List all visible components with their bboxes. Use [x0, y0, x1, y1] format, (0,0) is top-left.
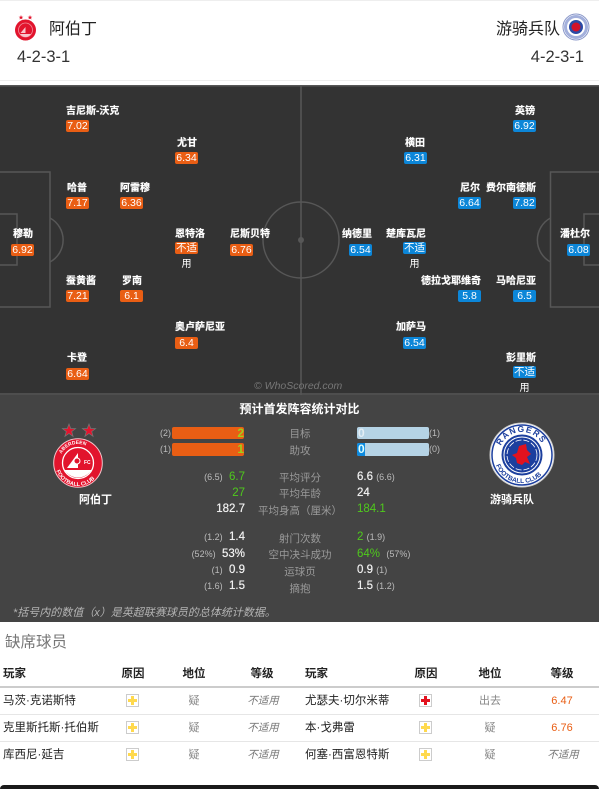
away team name: 游骑兵队	[496, 21, 560, 38]
player: 罗南: 6.1	[124, 290, 139, 302]
player: 阿雷穆	[120, 182, 150, 209]
stat: goals bar home: (2)	[160, 428, 171, 438]
age home: 27	[232, 487, 245, 499]
player: 吉尼斯-沃克: 吉尼斯-沃克	[66, 106, 119, 117]
stat: goals bar home: 2	[237, 426, 244, 440]
player: 横田: 6.31	[405, 152, 426, 164]
player: 彭里斯	[506, 352, 536, 394]
rating label: 平均评分	[279, 472, 321, 484]
player: 尼斯贝特	[230, 228, 270, 256]
away crest label: 游骑兵队	[490, 494, 534, 506]
age label: 平均年龄	[279, 488, 321, 500]
player: 楚库瓦尼: 楚库瓦尼	[386, 229, 426, 240]
player: 罗南	[120, 274, 143, 302]
row: 马茨·克诺斯特: 不适用	[247, 695, 279, 707]
player: 英镑: 英镑	[515, 106, 535, 117]
panel: match header	[0, 0, 599, 81]
column header: reason right: 原因	[414, 668, 438, 680]
icon: Aberdeen crest small	[15, 15, 36, 40]
player: 马哈尼亚: 马哈尼亚	[496, 276, 536, 287]
row: 何塞·西富恩特斯	[300, 748, 599, 762]
player: 罗南: 罗南	[122, 276, 142, 287]
column header: status right: 地位	[478, 668, 502, 680]
player: 潘杜尔: 潘杜尔	[560, 229, 590, 240]
row: 尤瑟夫·切尔米蒂: 6.47	[551, 695, 573, 707]
aerials label: 空中决斗成功	[268, 549, 332, 561]
comparison title: 预计首发阵容统计对比	[239, 402, 360, 416]
player: 德拉戈耶维奇: 德拉戈耶维奇	[421, 276, 481, 287]
player: 费尔南德斯	[486, 182, 536, 209]
home crest label: 阿伯丁	[79, 494, 112, 506]
column header: player left: 玩家	[3, 668, 26, 680]
aerials away: 64% (57%)	[357, 548, 410, 560]
player: 蚕黄酱: 蚕黄酱	[66, 276, 96, 287]
player: 纳德里: 6.54	[350, 244, 371, 256]
player: 加萨马: 6.54	[404, 337, 425, 349]
player: 尤甘	[175, 136, 198, 164]
icon: Rangers crest small	[562, 14, 590, 40]
row rule 2	[0, 741, 599, 742]
row: 本·戈弗雷: 疑	[484, 722, 496, 734]
player: 潘杜尔: 6.08	[568, 244, 589, 256]
row: 本·戈弗雷	[300, 721, 599, 735]
stat: assists bar home: 1	[237, 442, 244, 456]
row: 库西尼·延吉: 疑	[188, 749, 200, 761]
player: 穆勒: 6.92	[12, 244, 33, 256]
stat: assists bar away: 0	[358, 442, 365, 456]
player: 楚库瓦尼: 不适	[404, 242, 425, 254]
panel: missing players	[0, 622, 599, 784]
player: 彭里斯: 用	[520, 383, 530, 394]
aerials home: (52%) 53%	[192, 548, 245, 560]
player: 尼斯贝特: 6.76	[231, 244, 252, 256]
home team name: 阿伯丁	[49, 21, 97, 38]
player: 横田: 横田	[405, 138, 425, 149]
player: 楚库瓦尼: 用	[410, 259, 420, 270]
player: 尼斯贝特: 尼斯贝特	[230, 229, 270, 240]
player: 尤甘: 6.34	[176, 152, 197, 164]
row: 库西尼·延吉	[0, 748, 300, 762]
player: 穆勒: 穆勒	[13, 229, 33, 240]
stat: goals bar home	[160, 426, 244, 440]
player: 哈普	[66, 182, 89, 209]
stat: goals bar away: (1)	[429, 428, 440, 438]
watermark: © WhoScored.com	[254, 380, 342, 392]
icon: Aberdeen crest	[53, 423, 103, 488]
player: 阿雷穆: 6.36	[121, 197, 142, 209]
player: 尼尔: 尼尔	[460, 183, 480, 194]
player: 尤甘: 尤甘	[177, 138, 197, 149]
icon: Rangers crest: FOOTBALL CLUB	[496, 464, 541, 483]
player: 费尔南德斯: 费尔南德斯	[486, 183, 536, 194]
player: 纳德里	[342, 228, 372, 256]
height label: 平均身高（厘米）	[258, 505, 342, 517]
home formation: 4-2-3-1	[17, 48, 70, 66]
player: 恩特洛: 恩特洛	[175, 229, 205, 240]
player: 潘杜尔	[560, 228, 590, 256]
row: 库西尼·延吉: 不适用	[247, 749, 279, 761]
player: 楚库瓦尼	[386, 228, 426, 270]
player: 加萨马	[396, 320, 426, 349]
column header: rating left: 等级	[250, 668, 274, 680]
player: 蚕黄酱	[66, 274, 96, 302]
height away: 184.1	[357, 503, 386, 515]
player: 卡登: 卡登	[67, 353, 87, 364]
player: 哈普: 7.17	[67, 197, 88, 209]
icon: Aberdeen crest: FC	[84, 460, 91, 466]
column header: rating right: 等级	[550, 668, 574, 680]
icon: Rangers crest: RANGERS	[496, 426, 546, 446]
row: 克里斯托斯·托伯斯: 不适用	[247, 722, 279, 734]
player: 奥卢萨尼亚: 6.4	[179, 337, 194, 349]
player: 彭里斯: 彭里斯	[506, 353, 536, 364]
row: 何塞·西富恩特斯: 何塞·西富恩特斯	[305, 749, 389, 761]
player: 阿雷穆: 阿雷穆	[120, 183, 150, 194]
row: 尤瑟夫·切尔米蒂	[300, 694, 599, 708]
pitch markings	[0, 85, 599, 395]
player: 英镑	[513, 104, 536, 132]
stat: goals bar away	[357, 426, 440, 440]
player: 尼尔	[458, 182, 481, 209]
row: 马茨·克诺斯特	[0, 694, 300, 708]
player: 卡登	[66, 352, 89, 380]
row: 何塞·西富恩特斯: 疑	[484, 749, 496, 761]
player: 马哈尼亚	[496, 274, 536, 302]
player: 尼尔: 6.64	[459, 197, 480, 209]
row: 本·戈弗雷: 本·戈弗雷	[305, 722, 355, 734]
away formation: 4-2-3-1	[531, 48, 584, 66]
player: 彭里斯: 不适	[514, 366, 535, 378]
dribbles away: 0.9 (1)	[357, 564, 387, 576]
column header: player right: 玩家	[305, 668, 328, 680]
height home: 182.7	[216, 503, 245, 515]
player: 费尔南德斯: 7.82	[514, 197, 535, 209]
shots home: (1.2) 1.4	[204, 531, 245, 543]
missing players heading: 缺席球员	[5, 634, 67, 651]
row: 马茨·克诺斯特: 马茨·克诺斯特	[3, 695, 76, 707]
shots label: 射门次数	[279, 533, 321, 545]
stat label: goals: 目标	[290, 428, 310, 440]
footer bar	[0, 785, 599, 789]
row: 本·戈弗雷: 6.76	[551, 722, 573, 734]
player: 恩特洛	[175, 228, 205, 270]
row: 库西尼·延吉: 库西尼·延吉	[3, 749, 64, 761]
player: 吉尼斯-沃克	[66, 104, 120, 132]
icon: Rangers crest	[489, 422, 555, 488]
table header rule	[0, 686, 599, 688]
dribbles label: 运球页	[284, 566, 316, 578]
player: 蚕黄酱: 7.21	[67, 290, 88, 302]
stat: goals bar away: 0	[358, 426, 365, 440]
dribbles home: (1) 0.9	[212, 564, 245, 576]
column header: reason left: 原因	[122, 668, 144, 680]
row: 克里斯托斯·托伯斯: 克里斯托斯·托伯斯	[3, 722, 99, 734]
player: 恩特洛: 不适	[176, 242, 197, 254]
player: 加萨马: 加萨马	[396, 322, 426, 333]
tackles label: 摘抱	[290, 583, 310, 595]
player: 卡登: 6.64	[67, 368, 88, 380]
tackles away: 1.5 (1.2)	[357, 580, 395, 592]
player: 德拉戈耶维奇	[421, 274, 481, 302]
row: 尤瑟夫·切尔米蒂: 尤瑟夫·切尔米蒂	[305, 695, 389, 707]
player: 奥卢萨尼亚	[175, 320, 225, 349]
row: 克里斯托斯·托伯斯: 疑	[188, 722, 200, 734]
row: 尤瑟夫·切尔米蒂: 出去	[479, 695, 501, 707]
player: 奥卢萨尼亚: 奥卢萨尼亚	[175, 322, 225, 333]
stat: assists bar home: (1)	[160, 444, 171, 454]
footnote: *括号内的数值（x）是英超联赛球员的总体统计数据。	[13, 607, 276, 619]
player: 哈普: 哈普	[67, 183, 87, 194]
shots away: 2 (1.9)	[357, 531, 385, 543]
row: 马茨·克诺斯特: 疑	[188, 695, 200, 707]
row: 克里斯托斯·托伯斯	[0, 721, 300, 735]
player: 纳德里: 纳德里	[342, 229, 372, 240]
stat: assists bar home	[160, 442, 244, 456]
player: 穆勒	[11, 228, 34, 256]
panel: pitch	[0, 85, 599, 395]
panel: lineup comparison	[0, 395, 599, 622]
row: 何塞·西富恩特斯: 不适用	[547, 749, 579, 761]
player: 横田	[404, 136, 427, 164]
column header: status left: 地位	[182, 668, 206, 680]
player: 马哈尼亚: 6.5	[517, 290, 532, 302]
player: 吉尼斯-沃克: 7.02	[67, 120, 88, 132]
stat label: assists: 助攻	[290, 445, 310, 457]
age away: 24	[357, 487, 370, 499]
player: 恩特洛: 用	[182, 259, 192, 270]
stat: assists bar away	[357, 442, 440, 456]
rating away: 6.6 (6.6)	[357, 471, 395, 483]
player: 德拉戈耶维奇: 5.8	[462, 290, 477, 302]
icon: Aberdeen crest: FOOTBALL CLUB	[56, 470, 94, 486]
icon: Aberdeen crest: ABERDEEN	[59, 440, 87, 454]
row rule 1	[0, 714, 599, 715]
rating home: (6.5) 6.7	[204, 471, 245, 483]
tackles home: (1.6) 1.5	[204, 580, 245, 592]
player: 英镑: 6.92	[514, 120, 535, 132]
stat: assists bar away: (0)	[429, 444, 440, 454]
